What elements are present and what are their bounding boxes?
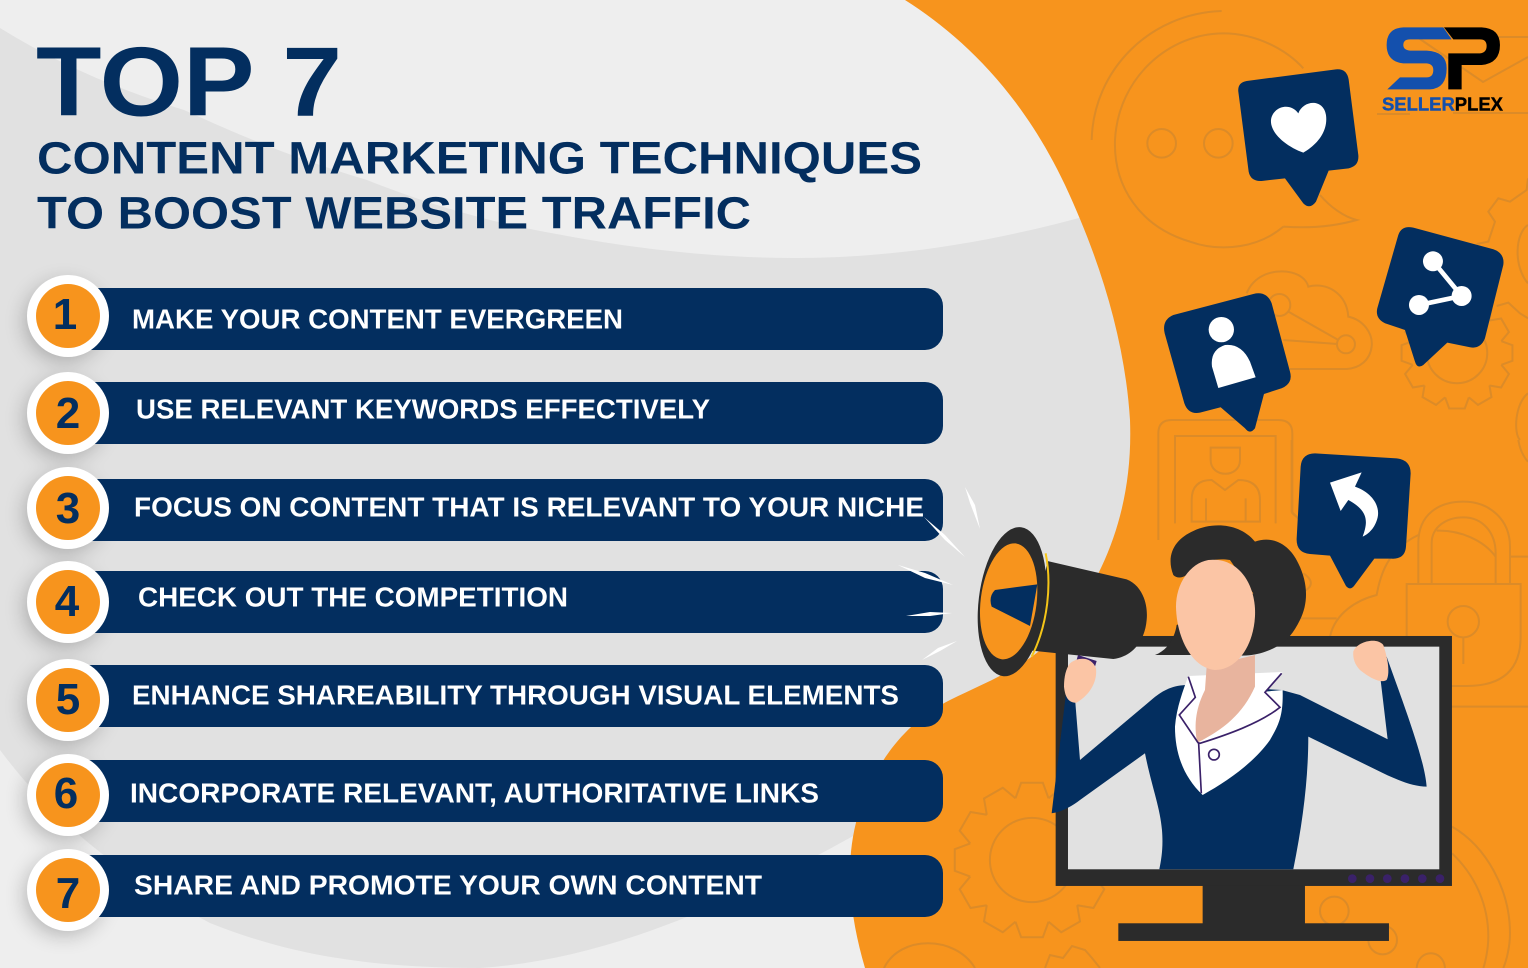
row 2: 2 (56, 389, 80, 438)
pattern: partial circle lower (884, 943, 975, 968)
background: light upper wave (0, 0, 1090, 258)
megaphone (970, 523, 1147, 680)
background pattern icons (884, 11, 1528, 968)
row 3 (27, 467, 943, 549)
row 5: ENHANCE SHAREABILITY THROUGH VISUAL ELEMENTS (132, 680, 899, 710)
row 7: SHARE AND PROMOTE YOUR OWN CONTENT (134, 870, 762, 900)
logo: Sellerplex (1382, 27, 1504, 115)
circle shadows (26, 284, 102, 934)
icon: person bubble (1164, 293, 1291, 432)
woman: right fist (1353, 641, 1388, 681)
pattern: padlock and arcs (1292, 440, 1528, 707)
row 2: USE RELEVANT KEYWORDS EFFECTIVELY (136, 394, 710, 424)
woman: neck (1196, 655, 1255, 743)
monitor (1056, 636, 1452, 941)
row 5: 5 (56, 675, 80, 724)
heading: top 7: TOP 7 (36, 26, 342, 136)
row 3: 3 (56, 484, 80, 533)
woman: suit (1052, 657, 1427, 869)
list of techniques (26, 275, 943, 934)
title (36, 26, 922, 238)
row 6: 6 (54, 769, 78, 818)
woman: collar lines (1179, 673, 1282, 793)
pattern: partial gear far right (1477, 178, 1528, 440)
row 1: MAKE YOUR CONTENT EVERGREEN (132, 304, 623, 334)
heading: subtitle line 2: TO BOOST WEBSITE TRAFFIC (37, 188, 751, 238)
row 4: CHECK OUT THE COMPETITION (138, 582, 568, 612)
row 4 (27, 561, 943, 643)
woman: button (1209, 749, 1219, 760)
row 7: 7 (56, 869, 80, 918)
pattern: partial gear lower (1045, 946, 1100, 968)
row 6: INCORPORATE RELEVANT, AUTHORITATIVE LINKS (130, 778, 819, 808)
icon: heart bubble (1238, 69, 1358, 206)
woman: left fist (1064, 659, 1096, 703)
pattern: speech bubble (1092, 11, 1357, 247)
heading: subtitle line 1: CONTENT MARKETING TECHNIQUES (37, 132, 922, 184)
pattern: envelope (1377, 37, 1528, 114)
woman: shirt (1175, 672, 1283, 795)
row 4: 4 (55, 577, 80, 626)
background: light lower region (0, 750, 866, 968)
background: orange blob (850, 0, 1528, 968)
row 7 (27, 849, 943, 931)
icon: share bubble (1377, 227, 1504, 367)
megaphone rays (898, 487, 980, 660)
row 5 (27, 659, 943, 741)
logo: Sellerplex: SELLERPLEX (1382, 94, 1504, 114)
pattern: cloud network (1247, 271, 1372, 369)
pattern: id card (1158, 420, 1298, 540)
icon: reply bubble (1297, 453, 1411, 588)
row 6 (27, 754, 943, 836)
row 3: FOCUS ON CONTENT THAT IS RELEVANT TO YOUR NICHE (134, 492, 924, 522)
pattern: gear bottom (955, 783, 1109, 937)
pattern: lower right arcs and circles (1320, 827, 1510, 968)
pattern: gear right (1402, 298, 1512, 408)
woman: face (1176, 560, 1255, 670)
illustration: woman on monitor with megaphone (970, 523, 1452, 941)
row 2 (27, 372, 943, 454)
woman: back hair (1155, 525, 1306, 656)
row 1: 1 (53, 290, 77, 339)
row 1 (27, 275, 943, 357)
